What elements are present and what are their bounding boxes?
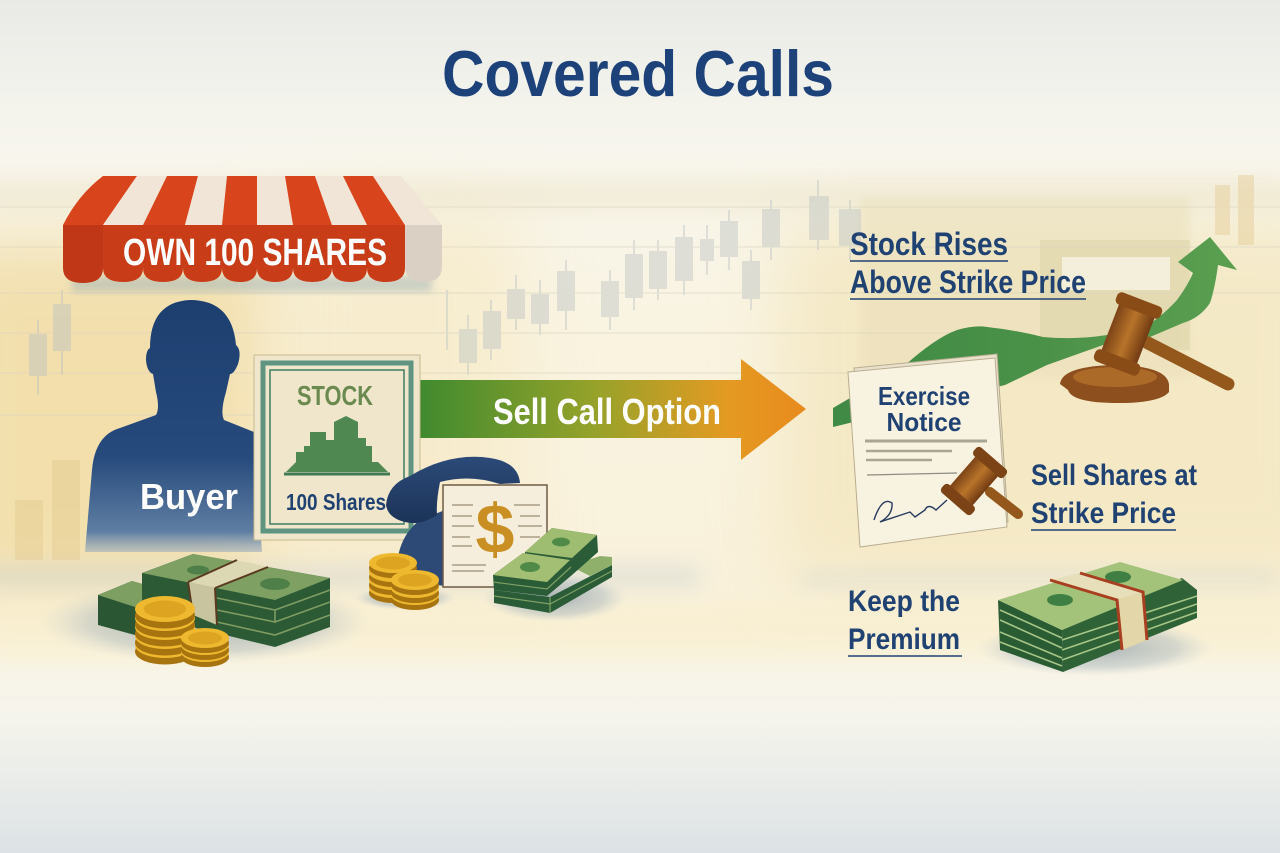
background candlestick chart <box>0 175 1280 560</box>
stock certificate: STOCK <box>297 380 373 411</box>
text: keep the premium: Keep the <box>848 585 960 618</box>
right cash stack <box>977 562 1213 676</box>
small gavel <box>939 445 1018 517</box>
telephone <box>386 457 520 586</box>
awning: own 100 shares <box>63 176 442 292</box>
left cash pile and coins <box>40 554 370 667</box>
exercise notice: Notice <box>886 407 962 437</box>
centre coins <box>355 553 455 610</box>
centre cash stack <box>483 528 627 622</box>
exercise notice: Exercise <box>878 381 970 411</box>
arrow label: Sell Call Option <box>493 391 721 432</box>
buyer silhouette <box>85 300 262 552</box>
large gavel <box>1060 291 1228 403</box>
heading: stock rises: Above Strike Price <box>850 264 1086 300</box>
dollar sign: $ <box>476 490 514 568</box>
exercise notice <box>848 354 1008 547</box>
text: keep the premium: Premium <box>848 623 960 656</box>
title: Covered Calls <box>442 37 834 110</box>
awning label: OWN 100 SHARES <box>123 232 387 274</box>
text: sell shares at strike price <box>1031 459 1197 530</box>
text: keep the premium <box>848 585 962 656</box>
heading: stock rises: Stock Rises <box>850 226 1008 262</box>
heading: stock rises <box>850 226 1086 300</box>
dollar notice paper <box>443 485 547 587</box>
buyer label: Buyer <box>140 476 238 517</box>
text: sell shares at strike price: Sell Shares at <box>1031 459 1197 492</box>
stock certificate <box>254 355 420 540</box>
stock certificate: 100 Shares <box>286 489 386 515</box>
rising green arrow <box>833 237 1237 427</box>
green to orange arrow <box>418 359 806 460</box>
text: sell shares at strike price: Strike Price <box>1031 497 1176 530</box>
